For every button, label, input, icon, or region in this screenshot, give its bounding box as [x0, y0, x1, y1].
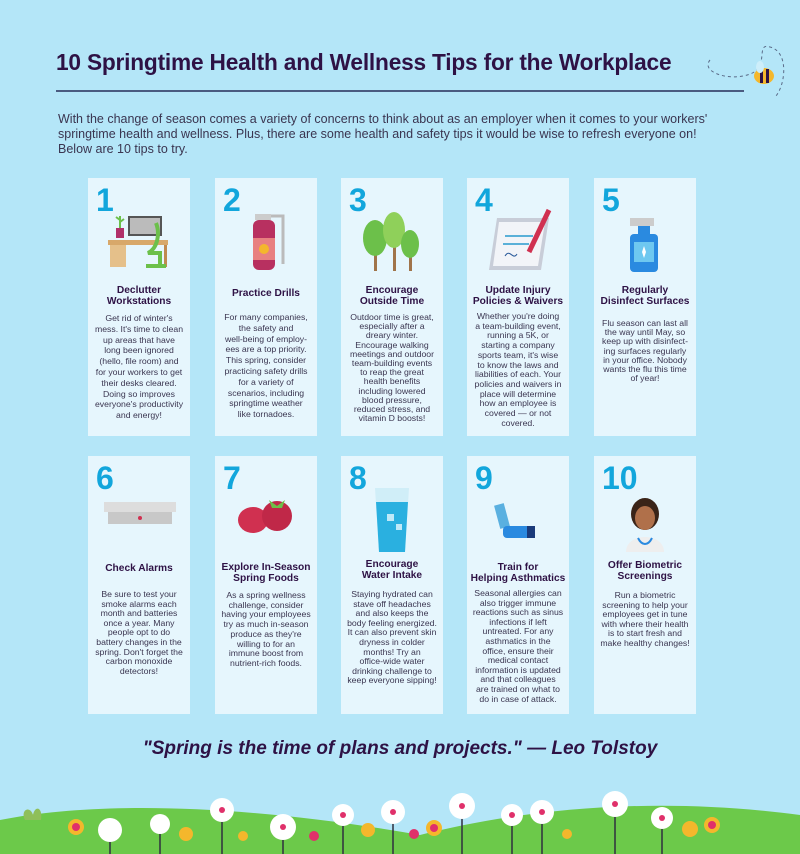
intro text: Below are 10 tips to try.: [58, 142, 188, 156]
card 3: [341, 178, 443, 436]
card 7: try as much in-season: [224, 619, 308, 629]
card 5: wants the flu this time: [603, 364, 687, 374]
card 6: people opt to do: [108, 627, 170, 637]
card 3: health benefits: [364, 376, 420, 386]
card 2: the safety and: [239, 323, 293, 333]
card 8: and also keeps the: [356, 608, 428, 618]
card 8: office-wide water: [359, 656, 425, 666]
card 9: are trained on what to: [476, 684, 560, 694]
heading: Policies & Waivers: [473, 296, 563, 307]
card 6: month and batteries: [101, 608, 177, 618]
card 6: spring. Don't forget the: [95, 647, 183, 657]
heading: Workstations: [107, 296, 171, 307]
heading: Screenings: [618, 571, 672, 582]
card 9: untreated. For any: [482, 626, 554, 636]
icon: policy document: [489, 208, 552, 270]
card 3: including lowered: [358, 386, 426, 396]
card 1: and energy!: [116, 410, 162, 420]
card 1: their desks cleared.: [101, 378, 177, 388]
card 2: springtime weather: [229, 398, 303, 408]
card 9: and that colleagues: [480, 674, 556, 684]
heading: Explore In-Season: [222, 562, 310, 573]
card 6: carbon monoxide: [106, 656, 172, 666]
card 2: 2: [223, 182, 241, 218]
heading: Practice Drills: [232, 288, 300, 299]
card 1: long been ignored: [104, 345, 174, 355]
card 1: [88, 178, 190, 436]
card 9: 9: [475, 460, 493, 496]
heading: Helping Asthmatics: [471, 573, 565, 584]
card 5: ing surfaces regularly: [604, 346, 686, 356]
card 7: willing to for an: [237, 639, 295, 649]
card 1: (hello, file room) and: [99, 356, 179, 366]
icon: bee with dashed trail: [708, 46, 784, 96]
flower meadow: [0, 791, 800, 854]
heading: Encourage: [366, 559, 418, 570]
card 4: policies and waivers in: [475, 379, 561, 389]
card 3: vitamin D boosts!: [359, 413, 425, 423]
card 6: battery changes in the: [96, 637, 182, 647]
card 3: blood pressure,: [362, 395, 422, 405]
card 10: employees get in tune: [602, 609, 688, 619]
card 3: Outdoor time is great,: [350, 312, 434, 322]
heading: [473, 285, 563, 307]
intro text: springtime health and wellness. Plus, there are some health and safety tips it would be wise to refresh everyone on!: [58, 127, 697, 141]
card 6: Be sure to test your: [101, 589, 177, 599]
intro text: [58, 112, 707, 156]
card 8: keep everyone sipping!: [347, 675, 437, 685]
card 6: 6: [96, 460, 114, 496]
card 2: This spring, consider: [226, 355, 306, 365]
card 8: [341, 456, 443, 714]
card 7: [215, 456, 317, 714]
heading: Encourage: [366, 285, 418, 296]
heading: [106, 285, 171, 307]
heading: [360, 285, 424, 307]
icon: trees: [363, 212, 419, 271]
card 3: reduced stress, and: [354, 404, 430, 414]
card 9: reactions such as sinus: [473, 607, 563, 617]
card 10: Run a biometric: [615, 590, 675, 600]
card 7: 7: [223, 460, 241, 496]
heading: Outside Time: [360, 296, 424, 307]
heading: Check Alarms: [105, 563, 173, 574]
icon: spray bottle: [630, 218, 658, 272]
card 9: Seasonal allergies can: [474, 588, 562, 598]
icon: inhaler: [494, 503, 535, 538]
heading: Disinfect Surfaces: [601, 296, 689, 307]
card 3: dreary winter.: [366, 330, 418, 340]
intro text: With the change of season comes a variety of concerns to think about as an employer when it comes to your workers': [58, 112, 707, 126]
icon: strawberries: [238, 500, 292, 533]
icon: water glass: [375, 488, 409, 552]
card 3: to reap the great: [360, 367, 424, 377]
heading: Train for: [498, 562, 538, 573]
card 10: make healthy changes!: [600, 638, 690, 648]
heading: [222, 562, 310, 584]
card 2: For many companies,: [224, 312, 308, 322]
heading: [608, 560, 682, 582]
card 4: covered.: [501, 418, 535, 428]
card 8: Staying hydrated can: [351, 589, 433, 599]
heading: Spring Foods: [233, 573, 299, 584]
heading: [601, 285, 689, 307]
heading: Offer Biometric: [608, 560, 682, 571]
card 2: [215, 178, 317, 436]
card 7: As a spring wellness: [226, 590, 306, 600]
card 5: of year!: [630, 373, 659, 383]
heading: [362, 559, 422, 581]
card 10: with where their health: [602, 618, 688, 628]
card 3: 3: [349, 182, 367, 218]
card 6: detectors!: [120, 666, 158, 676]
card 10: 10: [602, 460, 638, 496]
card 4: covered — or not: [485, 408, 551, 418]
card 1: up areas that have: [103, 335, 175, 345]
card 1: for your workers to get: [96, 367, 182, 377]
card 2: scenarios, including: [228, 388, 304, 398]
card 1: 1: [96, 182, 114, 218]
card 7: having your employees: [221, 609, 311, 619]
card 8: drinking challenge to: [352, 666, 432, 676]
card 9: medical contact: [488, 655, 548, 665]
card 1: Get rid of winter's: [105, 313, 173, 323]
card 3: meetings and outdoor: [350, 349, 434, 359]
card 4: to know the laws and: [477, 360, 559, 370]
icon: smoke alarm: [104, 502, 176, 524]
card 5: in your office. Nobody: [603, 355, 687, 365]
card 4: running a 5K, or: [487, 330, 549, 340]
card 8: body feeling energized.: [347, 618, 437, 628]
card 4: how an employee is: [480, 398, 556, 408]
icon: desk: [108, 216, 168, 268]
card 1: everyone's productivity: [95, 399, 183, 409]
card 3: Encourage walking: [355, 340, 429, 350]
card 4: starting a company: [481, 340, 555, 350]
card 8: 8: [349, 460, 367, 496]
card 6: once a year. Many: [104, 618, 174, 628]
card 1: mess. It's time to clean: [95, 324, 183, 334]
card 2: like tornadoes.: [238, 409, 294, 419]
card 10: is to start fresh and: [608, 628, 682, 638]
card 5: Flu season can last all: [602, 318, 688, 328]
quote: "Spring is the time of plans and projects." — Leo Tolstoy: [143, 738, 657, 759]
card 9: [467, 456, 569, 714]
card 1: Doing so improves: [103, 389, 175, 399]
card 8: It can also prevent skin: [348, 627, 436, 637]
card 10: [594, 456, 696, 714]
card 7: nutrient-rich foods.: [230, 658, 302, 668]
icon: fire extinguisher: [253, 214, 284, 270]
card 7: produce as they're: [230, 629, 302, 639]
heading: Declutter: [117, 285, 161, 296]
card 5: 5: [602, 182, 620, 218]
card 5: keep up with disinfect-: [602, 336, 688, 346]
card 8: stave off headaches: [353, 599, 431, 609]
card 9: information is updated: [475, 665, 561, 675]
card 6: smoke alarms each: [101, 599, 177, 609]
card 5: the way until May, so: [605, 327, 685, 337]
card 5: [594, 178, 696, 436]
card 9: also trigger immune: [480, 598, 556, 608]
card 2: ees are a top priority.: [226, 344, 306, 354]
card 4: liabilities of each. Your: [475, 369, 561, 379]
card 9: infections if left: [489, 617, 547, 627]
card 4: place will determine: [480, 389, 556, 399]
card 3: team-building events: [352, 358, 432, 368]
card 4: 4: [475, 182, 493, 218]
card 2: well-being of employ-: [225, 334, 307, 344]
card 6: [88, 456, 190, 714]
heading: Update Injury: [485, 285, 551, 296]
card 9: office, ensure their: [482, 646, 554, 656]
heading: Regularly: [622, 285, 668, 296]
card 8: months! Try an: [363, 647, 421, 657]
card 8: dryness in colder: [359, 637, 425, 647]
card 4: sports team, it's wise: [478, 350, 558, 360]
card 2: for a variety of: [238, 377, 294, 387]
icon: doctor: [626, 498, 664, 552]
card 4: a team-building event,: [475, 321, 561, 331]
card 7: immune boost from: [229, 648, 303, 658]
card 9: do in case of attack.: [479, 694, 557, 704]
heading: [471, 562, 565, 584]
title: 10 Springtime Health and Wellness Tips for the Workplace: [56, 49, 671, 75]
card 9: asthmatics in the: [485, 636, 551, 646]
card 7: challenge, consider: [229, 600, 303, 610]
card 2: practicing safety drills: [224, 366, 308, 376]
card 4: Whether you're doing: [477, 311, 559, 321]
card 10: screening to help your: [602, 600, 688, 610]
card 4: [467, 178, 569, 436]
heading: Water Intake: [362, 570, 422, 581]
card 3: especially after a: [359, 321, 425, 331]
